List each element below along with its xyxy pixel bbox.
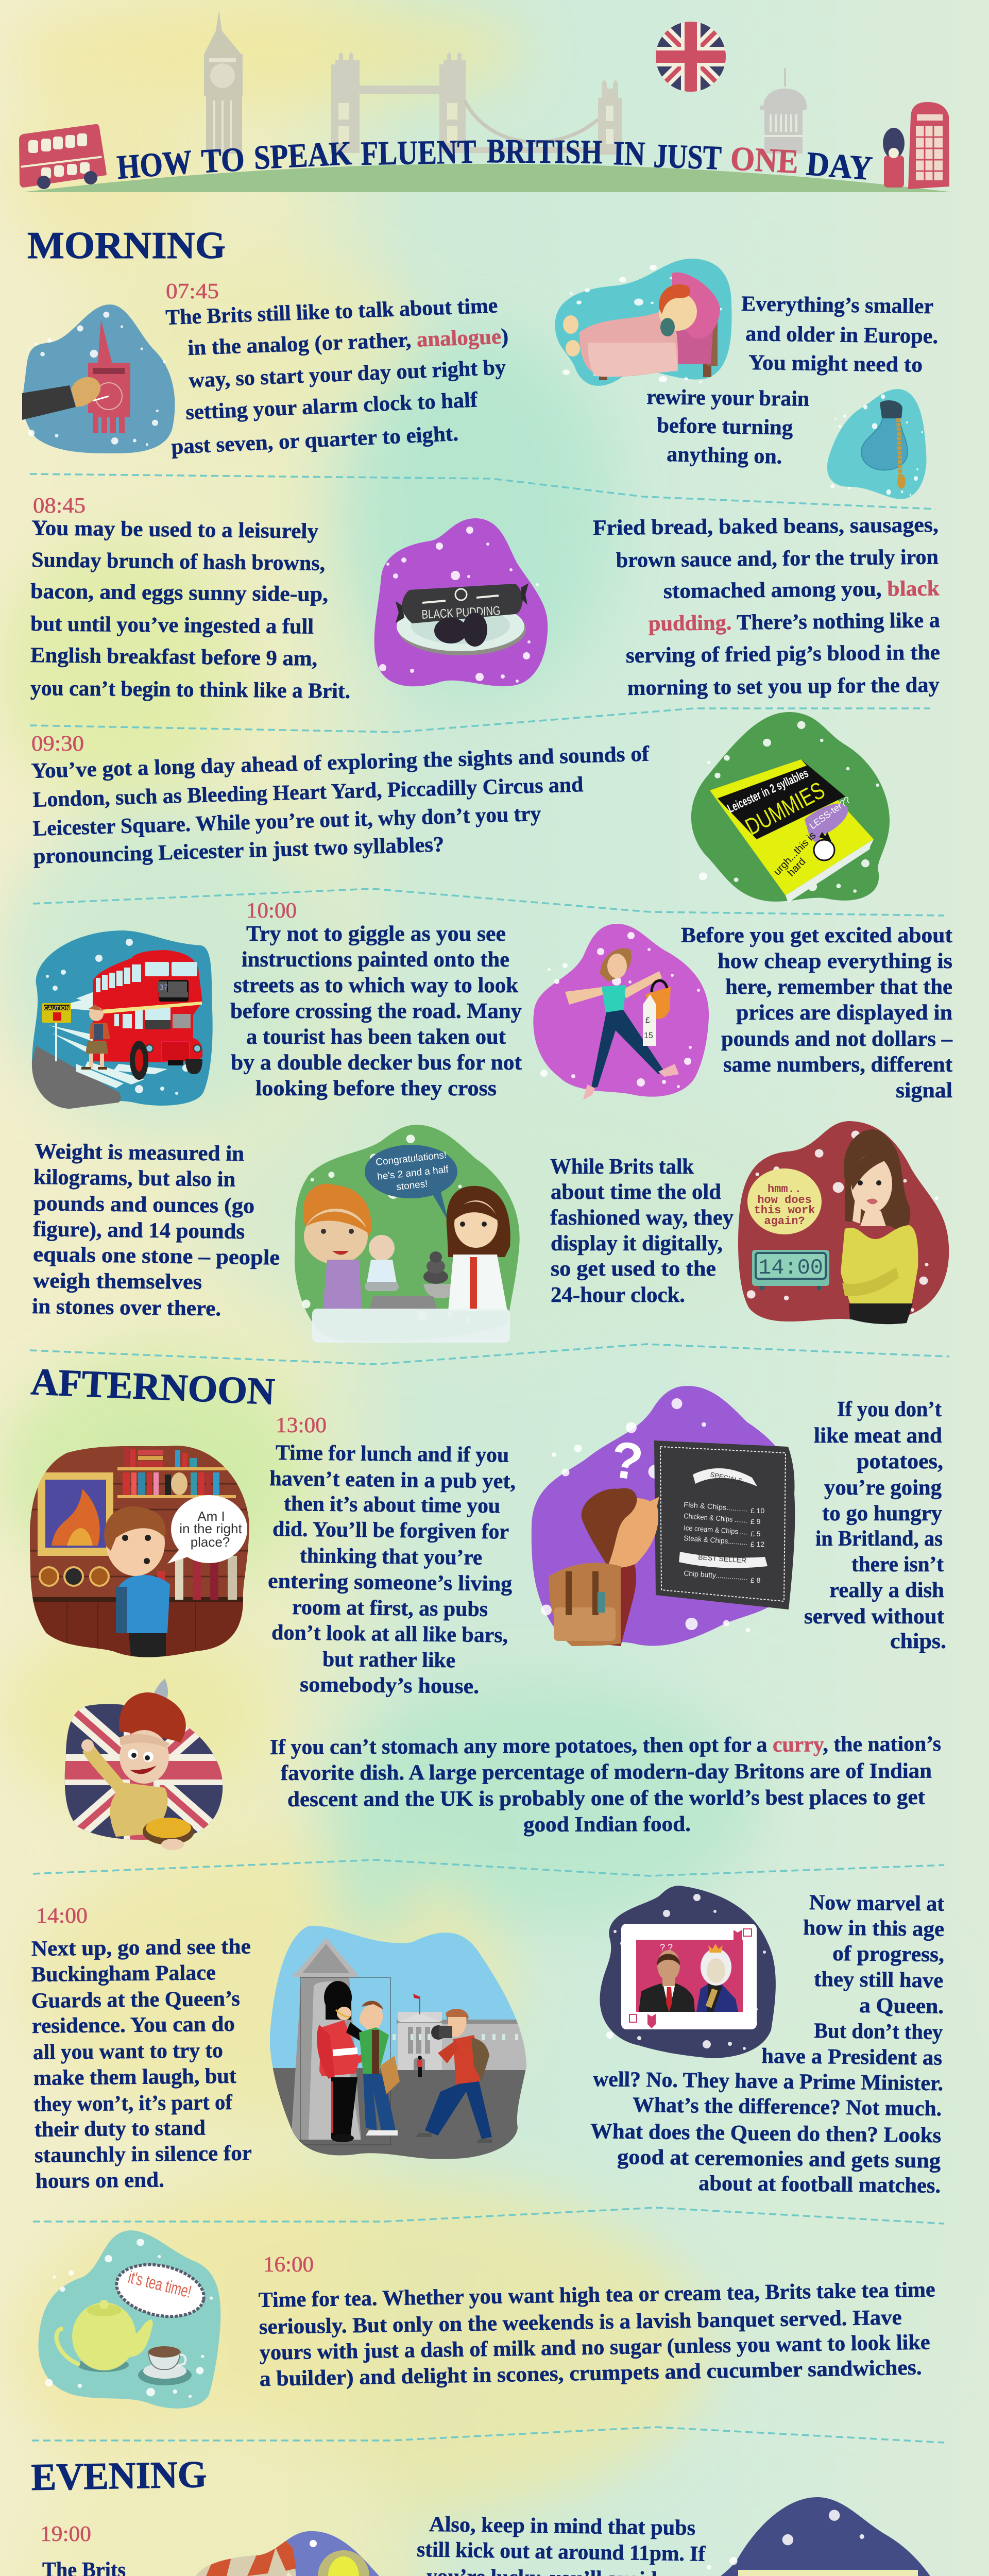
text: 13:00: don’t look at all like bars, (271, 1621, 508, 1648)
text: before you get excited: how cheap everything is (718, 950, 952, 973)
text: queen and prime minister: But don’t they (814, 2019, 943, 2044)
illustration: pub sign (685, 2497, 953, 2576)
illustration: woman shopping: 15 (644, 1031, 653, 1040)
text: 14:00: Buckingham Palace (31, 1961, 216, 1987)
illustration: book: LESS-ter?? (808, 794, 852, 831)
text: while brits talk: so get used to the (551, 1257, 716, 1281)
text: curry: favorite dish. A large percentage of modern-day Britons are of Indian (281, 1759, 932, 1785)
illustration: queen playing card (600, 1886, 776, 2058)
text: meat and potatoes: like meat and (814, 1424, 942, 1448)
text: 16:00: 16:00 (263, 2253, 314, 2277)
text: fried bread: brown sauce and, for the truly iron (616, 545, 939, 572)
text: 16:00 (258, 2253, 935, 2391)
text: curry: If you can’t stomach any more potatoes, then opt for a curry, the nation’s (270, 1732, 941, 1759)
illustration: tourist reading chalkboard menu: £ 10 (751, 1506, 764, 1515)
text: meat and potatoes: you’re going (824, 1476, 942, 1500)
illustration: tea pot: it's tea time! (126, 2267, 194, 2302)
illustration: woman shopping (533, 924, 709, 1100)
text: 16:00: yours with just a dash of milk and no sugar (unless you want to look like (259, 2331, 930, 2365)
text: weight: kilograms, but also in (33, 1165, 235, 1192)
illustration: boy in a pub: in the right (179, 1521, 242, 1536)
illustration: baby on scales (295, 1125, 520, 1343)
illustration: boy in a pub: Am I (197, 1509, 225, 1524)
text: everything's smaller: Everything’s smaller (741, 292, 933, 318)
text: 08:45: You may be used to a leisurely (31, 516, 318, 544)
illustration: baby on scales: he's 2 and a half (377, 1164, 449, 1182)
illustration: woman shopping: £ (645, 1016, 650, 1025)
text: pubs close: still kick out at around 11pm. If (417, 2538, 706, 2566)
text: 14:00: make them laugh, but (33, 2064, 236, 2090)
text: queen and prime minister: well? No. They have a Prime Minister. (593, 2067, 943, 2095)
text: while brits talk: fashioned way, they (550, 1206, 734, 1230)
text: 14:00: Next up, go and see the (31, 1935, 251, 1961)
text: 13:00: did. You’ll be forgiven for (272, 1517, 509, 1544)
illustration: double decker bus: 37 (159, 983, 168, 992)
heading: morning: MORNING (27, 225, 226, 267)
title: BRITISH (487, 132, 602, 171)
title: IN (613, 134, 645, 173)
text: while brits talk: about time the old (551, 1180, 721, 1204)
text: 08:45: you can’t begin to think like a Brit. (30, 676, 350, 703)
illustration: woman thinking about digital clock (738, 1121, 949, 1324)
title: JUST (653, 137, 722, 177)
text: queen and prime minister: a Queen. (859, 1994, 944, 2019)
illustration: boy in a pub: place? (191, 1534, 230, 1550)
text: 14:00: Guards at the Queen’s (31, 1987, 240, 2013)
illustration: book: DUMMIES (741, 776, 829, 840)
text: everything's smaller: and older in Europe. (745, 322, 938, 348)
illustration: woman thinking about digital clock: again? (764, 1215, 805, 1228)
text: before you get excited: prices are displayed in (736, 1001, 952, 1025)
text: 14:00: residence. You can do (32, 2012, 235, 2038)
heading: evening: EVENING (31, 2453, 207, 2499)
text: 13:00: somebody’s house. (300, 1673, 479, 1699)
illustration: tourist reading chalkboard menu: SPECIALS (709, 1470, 743, 1485)
text: 10:00: a tourist has been taken out (246, 1025, 506, 1049)
illustration: tourist reading chalkboard menu: Steak & Chips.......... (684, 1534, 748, 1547)
text: while brits talk: display it digitally, (551, 1232, 723, 1256)
text: everything's smaller: anything on. (667, 443, 782, 469)
text: 14:00: hours on end. (36, 2168, 164, 2193)
text: fried bread: Fried bread, baked beans, sausages, (593, 513, 939, 540)
text: 13:00: haven’t eaten in a pub yet, (269, 1467, 516, 1494)
divider (32, 2427, 944, 2443)
text: 13:00 (268, 1414, 516, 1699)
text: fried bread: stomached among you, black (663, 577, 940, 603)
illustration: tourist reading chalkboard menu: Fish & Chips.......... (684, 1500, 748, 1513)
text: while brits talk (550, 1155, 734, 1307)
illustration: tourist reading chalkboard menu: £ 12 (751, 1540, 764, 1548)
text: 13:00: Time for lunch and if you (276, 1441, 509, 1467)
text: fried bread (593, 513, 940, 700)
text: 10:00: before crossing the road. Many (230, 999, 522, 1023)
text: meat and potatoes: really a dish (829, 1579, 944, 1602)
divider (30, 708, 930, 732)
text: queen and prime minister: how in this age (803, 1916, 944, 1941)
illustration: Buckingham Palace guard and tourists (268, 1922, 531, 2166)
text: 13:00: entering someone’s living (268, 1569, 512, 1596)
text: 16:00: Time for tea. Whether you want high tea or cream tea, Brits take tea time (258, 2278, 935, 2312)
icon: guard and phone box (883, 102, 949, 189)
illustration: romantic dinner (185, 2527, 407, 2576)
text: 07:45: way, so start your day out right by (188, 355, 506, 393)
text: meat and potatoes (804, 1398, 946, 1653)
text: 08:45 (30, 494, 350, 703)
text: queen and prime minister: have a President as (761, 2044, 942, 2070)
text: everything's smaller (646, 292, 938, 469)
text: queen and prime minister: of progress, (832, 1942, 944, 1967)
illustration: boy in a pub (30, 1443, 251, 1664)
text: meat and potatoes: chips. (890, 1630, 946, 1653)
text: before you get excited (681, 924, 953, 1103)
text: meat and potatoes: there isn’t (851, 1553, 944, 1577)
text: before you get excited: pounds and not dollars – (721, 1027, 953, 1051)
text: before you get excited: here, remember that the (725, 975, 952, 999)
illustration: tourist reading chalkboard menu: £ 8 (751, 1576, 761, 1584)
title: FLUENT (361, 133, 476, 173)
divider (30, 474, 935, 509)
text: meat and potatoes: served without (804, 1605, 944, 1629)
skyline: Big Ben (204, 10, 243, 154)
text: 14:00: they won’t, it’s part of (33, 2091, 233, 2116)
text: while brits talk: 24-hour clock. (551, 1283, 685, 1307)
illustration: book: urgh...this is (772, 830, 819, 877)
illustration: black pudding (374, 518, 548, 686)
text: before you get excited: same numbers, different (723, 1053, 952, 1077)
illustration: woman thinking about digital clock: 14:00 (758, 1256, 823, 1280)
illustration: woman thinking about digital clock: this work (754, 1204, 815, 1217)
text: pubs close (417, 2513, 706, 2576)
text: 10:00: Try not to giggle as you see (246, 922, 506, 946)
illustration: baby on scales: stones! (396, 1179, 428, 1193)
illustration: tourist reading chalkboard menu (532, 1386, 795, 1646)
text: 07:45: 07:45 (166, 280, 219, 303)
title (115, 132, 874, 188)
text: fried bread: morning to set you up for the day (627, 673, 940, 700)
illustration: clock being rewound (22, 304, 175, 453)
text: 14:00 (31, 1904, 252, 2193)
title: SPEAK (253, 134, 353, 177)
illustration: woman thinking about digital clock: hmm.. (768, 1183, 802, 1196)
text: fried bread: pudding. There’s nothing like a (649, 608, 940, 636)
illustration: tourist reading chalkboard menu: Chip butty................ (684, 1569, 748, 1582)
text: 08:45: bacon, and eggs sunny side-up, (30, 580, 328, 606)
text: 09:30: London, such as Bleeding Heart Yard, Piccadilly Circus and (32, 773, 584, 812)
illustration: black pudding: BLACK PUDDING (421, 604, 501, 622)
illustration: tourist reading chalkboard menu: Chicken & Chips ....... (684, 1512, 748, 1524)
text: 07:45: past seven, or quarter to eight. (170, 422, 459, 459)
text: 13:00: thinking that you’re (300, 1544, 482, 1570)
text: everything's smaller: You might need to (748, 351, 923, 377)
text: before you get excited: Before you get excited about (681, 924, 952, 947)
text: weight: weigh themselves (33, 1269, 202, 1294)
title: ONE (729, 140, 799, 181)
text: 10:00: streets as to which way to look (233, 974, 519, 997)
text: weight: figure), and 14 pounds (33, 1217, 245, 1244)
illustration: tourist reading chalkboard menu: Ice cream & Chips .... (684, 1523, 748, 1536)
text: 10:00: 10:00 (246, 899, 297, 923)
text: everything's smaller: before turning (657, 414, 793, 440)
text: 10:00 (230, 899, 522, 1100)
divider (33, 1860, 944, 1876)
text: 13:00: room at first, as pubs (292, 1596, 488, 1621)
illustration: light bulb (827, 389, 926, 499)
text: 10:00: instructions painted onto the (242, 948, 509, 972)
text: everything's smaller: rewire your brain (646, 385, 809, 411)
text: 13:00: 13:00 (276, 1414, 327, 1437)
title: HOW (115, 143, 194, 187)
text: meat and potatoes: potatoes, (857, 1450, 943, 1473)
text: queen and prime minister: they still have (814, 1968, 943, 1993)
illustration: book: Leicester in 2 syllables (725, 766, 811, 816)
text: 14:00: 14:00 (36, 1904, 88, 1928)
skyline: St Paul's dome (760, 68, 807, 154)
text: 07:45: in the analog (or rather, analogue) (187, 325, 509, 360)
text: 19:00: 19:00 (40, 2522, 91, 2546)
icon: union jack (656, 22, 726, 92)
text: 13:00: but rather like (322, 1648, 455, 1672)
text: 08:45: English breakfast before 9 am, (30, 643, 317, 671)
text: 14:00: their duty to stand (35, 2116, 206, 2142)
text: 08:45: but until you’ve ingested a full (30, 612, 314, 639)
text: pubs close: Also, keep in mind that pubs (429, 2513, 695, 2540)
illustration: baby on scales: Congratulations! (375, 1150, 447, 1168)
illustration: tourist reading chalkboard menu: BEST SELLER (698, 1553, 747, 1565)
text: weight: equals one stone – people (33, 1243, 280, 1270)
text: queen and prime minister: Now marvel at (809, 1891, 944, 1916)
illustration: tea pot (38, 2230, 220, 2409)
text: 07:45 (165, 280, 509, 459)
text: 09:30: Leicester Square. While you’re out it, why don’t you try (32, 802, 541, 841)
text: 13:00: then it’s about time you (284, 1492, 500, 1518)
text: 08:45: Sunday brunch of hash browns, (31, 548, 325, 575)
text: queen and prime minister: good at ceremonies and gets sung (617, 2145, 941, 2173)
text: meat and potatoes: in Britland, as (815, 1527, 943, 1551)
text: while brits talk: While Brits talk (550, 1155, 694, 1179)
text: 07:45: The Brits still like to talk about time (165, 294, 498, 330)
text: curry: descent and the UK is probably one of the world’s best places to get (287, 1786, 925, 1811)
green hill (22, 164, 952, 192)
illustration: queen playing card: ? ? (660, 1942, 673, 1953)
text: weight: pounds and ounces (go (33, 1192, 254, 1218)
text: before you get excited: signal (896, 1079, 952, 1103)
text: queen and prime minister (590, 1891, 944, 2198)
illustration: tourist reading chalkboard menu: ? (607, 1430, 646, 1492)
heading: afternoon: AFTERNOON (30, 1361, 276, 1413)
text: 16:00: a builder) and delight in scones, crumpets and cucumber sandwiches. (259, 2356, 922, 2391)
text: weight: in stones over there. (32, 1295, 221, 1320)
text: 16:00: seriously. But only on the weekends is a lavish banquet served. Have (259, 2306, 902, 2339)
divider (33, 889, 944, 916)
text: 09:30: 09:30 (31, 732, 84, 756)
illustration: book (691, 712, 890, 903)
text: queen and prime minister: about at football matches. (698, 2172, 941, 2198)
text: 19:00 (40, 2522, 167, 2576)
text: weight: Weight is measured in (35, 1140, 244, 1166)
text: 14:00: staunchly in silence for (35, 2142, 252, 2167)
text: 10:00: by a double decker bus for not (231, 1051, 522, 1075)
illustration: book: hard (786, 856, 808, 878)
text: 09:30: pronouncing Leicester in just two syllables? (33, 833, 445, 869)
illustration: tourist reading chalkboard menu: £ 5 (751, 1530, 761, 1538)
illustration: child in bed (555, 259, 731, 386)
illustration: double decker bus: CAUTION (44, 1005, 70, 1011)
icon: red bus (19, 124, 107, 189)
text: queen and prime minister: What does the Queen do then? Looks (590, 2120, 941, 2147)
text: 09:30 (31, 732, 650, 869)
text: 14:00: all you want to try to (33, 2039, 223, 2064)
text: weight (32, 1140, 280, 1320)
text: curry (270, 1732, 941, 1837)
illustration: double decker bus (32, 930, 213, 1109)
text: 10:00: looking before they cross (255, 1077, 497, 1100)
text: queen and prime minister: What’s the difference? Not much. (633, 2093, 942, 2121)
divider (33, 2208, 944, 2224)
text: 09:30: You’ve got a long day ahead of exploring the sights and sounds of (31, 742, 650, 783)
divider (30, 1344, 949, 1364)
text: fried bread: serving of fried pig’s blood in the (626, 641, 940, 668)
illustration: tourist reading chalkboard menu: £ 9 (751, 1517, 761, 1526)
illustration: woman thinking about digital clock: how does (757, 1194, 812, 1207)
text: curry: good Indian food. (523, 1812, 691, 1837)
text: 08:45: 08:45 (33, 494, 86, 518)
text: meat and potatoes: to go hungry (822, 1502, 942, 1526)
text: 07:45: setting your alarm clock to half (185, 388, 479, 425)
skyline: Tower Bridge (331, 52, 622, 155)
illustration: curry man on union jack (62, 1679, 227, 1850)
title: TO (200, 141, 246, 180)
title: DAY (805, 145, 874, 188)
text: meat and potatoes: If you don’t (837, 1398, 942, 1421)
